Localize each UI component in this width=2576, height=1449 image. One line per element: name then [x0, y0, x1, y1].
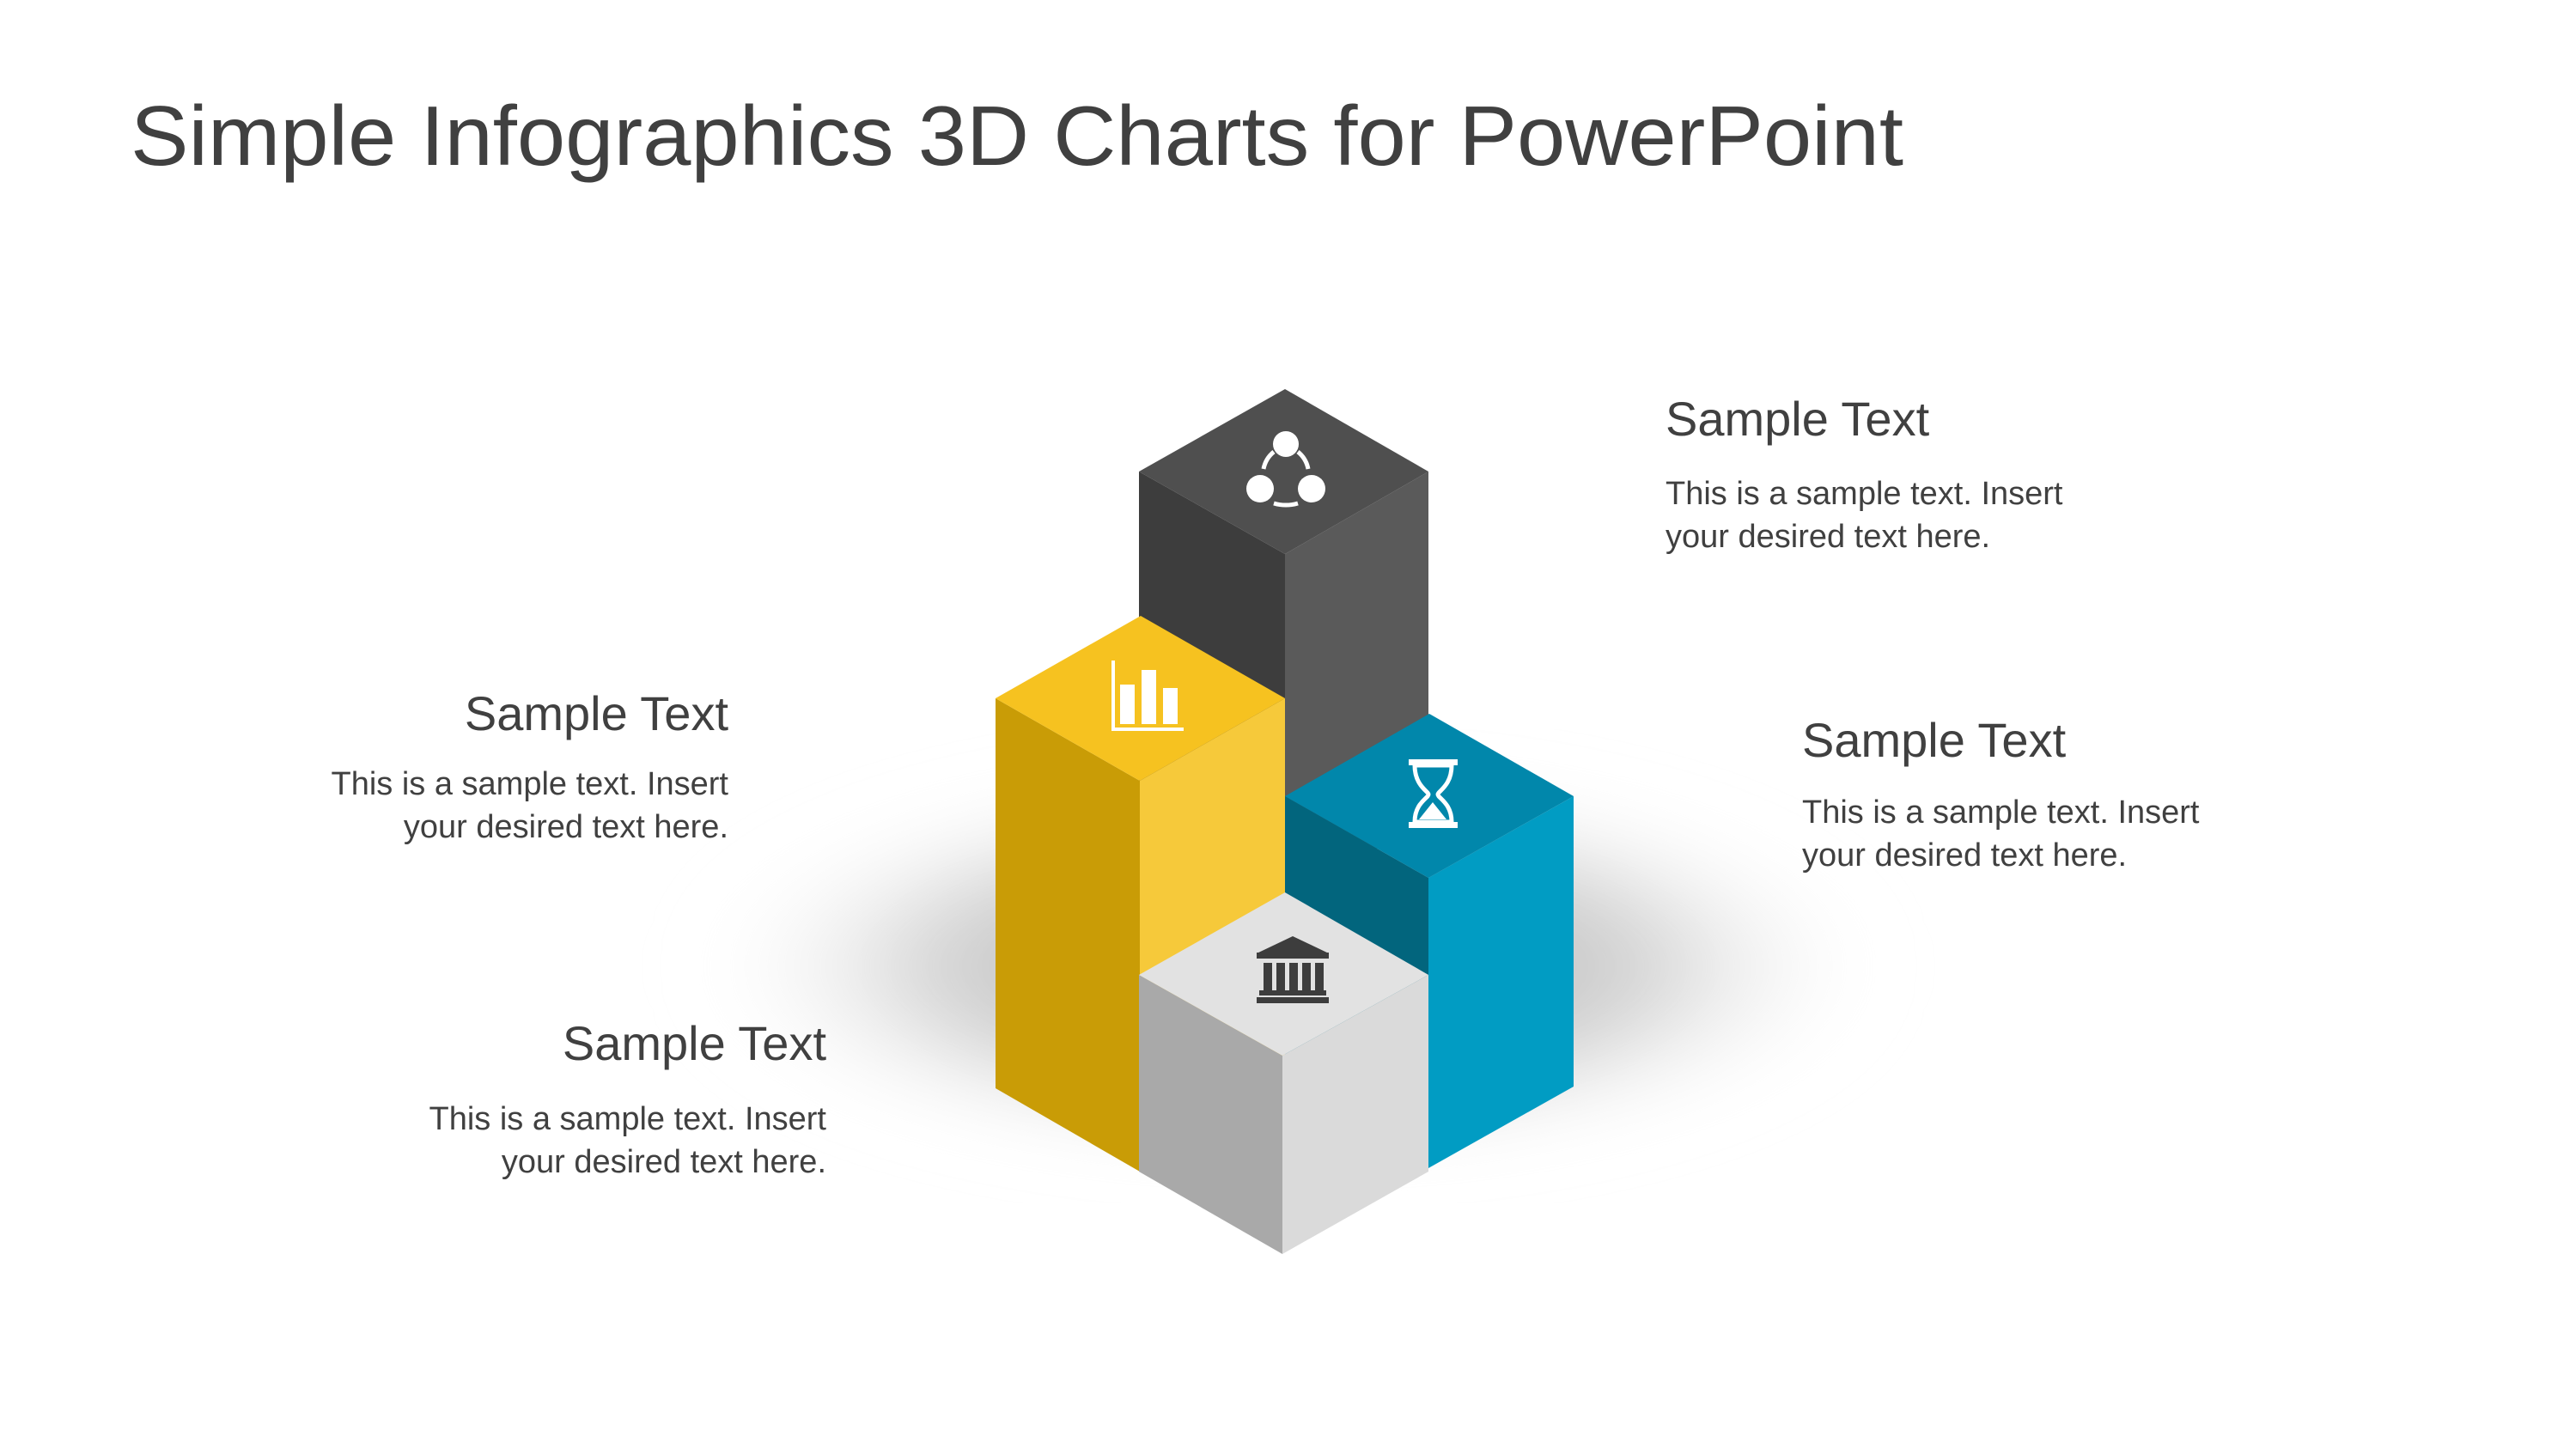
text block: top right: Sample Text	[1666, 392, 1930, 446]
text block: left bottom	[429, 1016, 826, 1180]
text block: left top: This is a sample text. Insert	[332, 766, 728, 802]
text block: left top	[332, 686, 728, 845]
text block: left bottom: your desired text here.	[502, 1144, 826, 1180]
chart: 3D cubes	[996, 389, 1574, 1254]
text block: left bottom: This is a sample text. Insert	[429, 1101, 826, 1137]
cube: blue	[1285, 714, 1574, 1168]
text block: right middle: your desired text here.	[1802, 837, 2127, 874]
text block: right middle: This is a sample text. Insert	[1802, 795, 2200, 831]
text block: top right: your desired text here.	[1666, 519, 1990, 555]
text block: top right: This is a sample text. Insert	[1666, 476, 2063, 512]
icon: hourglass	[1409, 759, 1458, 828]
text block: right middle: Sample Text	[1802, 713, 2067, 767]
icon: network	[1246, 431, 1325, 505]
cube: gray	[1139, 892, 1428, 1254]
title: Simple Infographics 3D Charts for PowerPoint	[131, 88, 1903, 183]
shadow	[687, 769, 1890, 1164]
text block: left bottom: Sample Text	[563, 1016, 826, 1070]
icon: bank	[1257, 936, 1329, 1003]
cube: dark	[1139, 389, 1428, 849]
text block: left top: Sample Text	[465, 686, 728, 740]
cube: yellow	[996, 616, 1285, 1172]
icon: bar chart	[1111, 661, 1184, 731]
text block: top right	[1666, 392, 2063, 555]
text block: left top: your desired text here.	[404, 809, 728, 845]
text block: right middle	[1802, 713, 2200, 874]
